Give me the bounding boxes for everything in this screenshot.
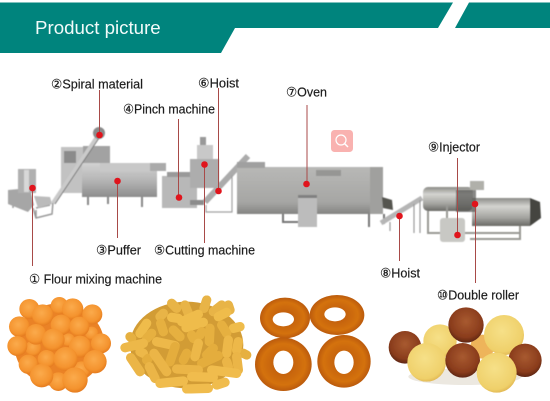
label 1: ① Flour mixing machine [29,272,162,286]
machine: cutting machine [190,137,219,205]
label 4: ④Pinch machine [123,102,215,116]
callout marker 2 [96,90,103,138]
callout marker 9 [454,158,461,238]
machine: hoist conveyor six [205,156,248,212]
machine: oven [237,162,393,227]
food: brown and yellow cereal balls [389,307,542,393]
callout marker 6 [215,88,222,194]
icon: magnifier button [331,130,353,152]
callout marker 3 [114,178,121,238]
banner: main teal band [0,2,453,53]
label 5: ⑤Cutting machine [154,242,255,258]
header banner [0,2,550,53]
machine: spiral material feeder [53,127,105,204]
label 10: ⑩Double roller [437,288,520,302]
machine: pinch machine [162,172,197,208]
food: corn puff sticks [125,300,247,389]
callout marker 7 [303,105,310,187]
label 7: ⑦Oven [286,84,327,100]
machine: puffer with control cabinet [61,146,166,207]
food: orange rings [255,295,371,391]
label 6: ⑥Hoist [198,76,239,90]
label 3: ③Puffer [96,242,142,258]
heading: Product picture [35,17,161,38]
machine: hoist conveyor eight [381,198,422,233]
machine: flour mixer [8,169,53,218]
production line machinery [8,127,541,242]
callout marker 5 [201,161,208,243]
callout lines and dots [29,88,478,283]
machine labels [29,76,520,302]
callout marker 1 [29,185,36,266]
machine: injector and double roller [423,181,541,242]
callout marker 4 [176,119,182,201]
label 8: ⑧Hoist [380,266,420,280]
banner: right teal band [455,2,550,28]
callout marker 10 [472,201,478,283]
label 2: ②Spiral material [51,76,143,92]
food: orange puff balls [7,297,111,393]
callout marker 8 [396,213,403,261]
label 9: ⑨Injector [428,140,481,154]
